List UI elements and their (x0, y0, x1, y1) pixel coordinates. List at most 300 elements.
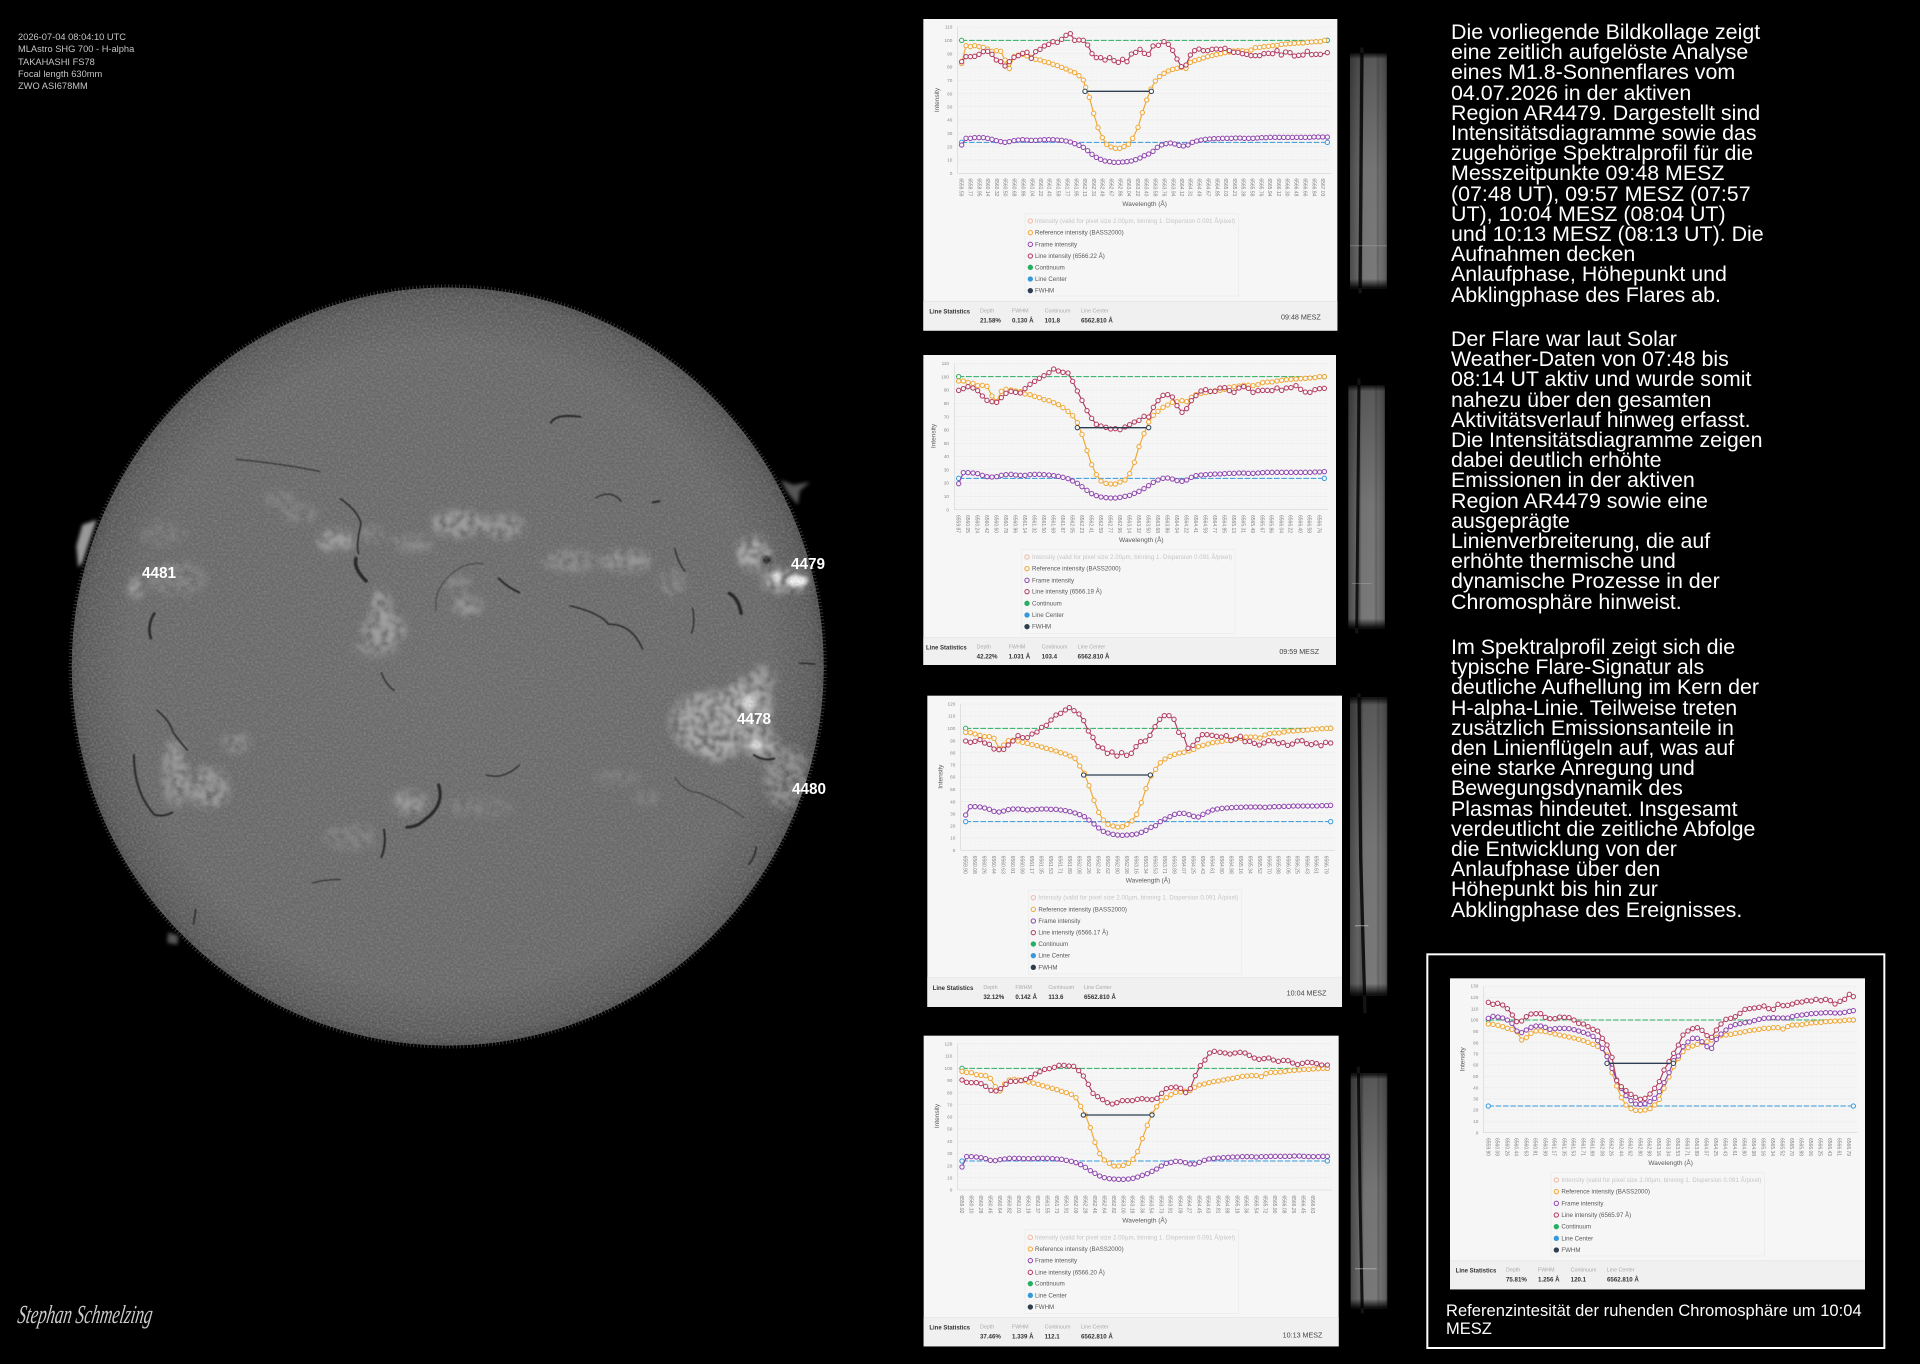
line statistics footer: Line Center (1607, 1267, 1635, 1273)
continuum and line center lines (1488, 1020, 1853, 1106)
y axis ticks: 0 (950, 1188, 953, 1193)
FWHM marker (1084, 773, 1150, 777)
x axis wavelength labels: 6566.06 (1284, 856, 1290, 874)
legend: Line Center (1035, 1292, 1067, 1299)
x axis wavelength labels: 6561.50 (1040, 515, 1046, 533)
x axis wavelength labels: 6564.59 (1201, 515, 1207, 533)
line statistics footer: Line Center (1081, 308, 1109, 314)
line statistics footer: 1.256 Å (1538, 1276, 1560, 1283)
series: reference intensity (962, 1068, 1327, 1166)
x axis wavelength labels: 6566.84 (1310, 178, 1316, 197)
line statistics footer: 0.142 Å (1015, 994, 1037, 1001)
x axis wavelength labels: 6560.44 (1513, 1138, 1519, 1156)
x axis wavelength labels: 6565.58 (1249, 178, 1255, 197)
y axis ticks: 60 (944, 428, 949, 433)
x axis wavelength labels: 6566.66 (1301, 178, 1307, 197)
x axis wavelength labels: 6563.16 (1132, 856, 1138, 874)
x axis wavelength labels: 6562.80 (1114, 856, 1120, 874)
y axis ticks: 100 (948, 726, 956, 731)
line statistics footer: 09:59 MESZ (1279, 648, 1320, 656)
y axis ticks: 120 (945, 1041, 953, 1046)
y axis ticks: 30 (947, 131, 953, 136)
x axis wavelength labels: 6560.32 (993, 178, 999, 197)
x axis wavelength labels: 6560.64 (996, 1195, 1002, 1214)
line statistics footer: FWHM (1012, 308, 1029, 314)
y axis ticks: 90 (947, 1078, 953, 1083)
line statistics footer (923, 637, 1336, 665)
line statistics footer: 37.46% (980, 1334, 1001, 1341)
x axis wavelength labels: 6561.89 (1589, 1138, 1595, 1156)
series: reference intensity (966, 728, 1331, 827)
x axis wavelength labels: 6564.45 (1195, 1195, 1201, 1214)
y axis ticks: 10 (1473, 1119, 1479, 1124)
series: frame intensity (1488, 1011, 1853, 1104)
x axis wavelength labels: 6560.99 (1019, 856, 1025, 874)
x axis wavelength labels: 6564.67 (1204, 178, 1210, 197)
x axis wavelength labels: 6561.59 (1055, 178, 1061, 197)
x axis wavelength labels: 6564.25 (1712, 1138, 1718, 1156)
legend: Reference intensity (BASS2000) (1038, 906, 1127, 913)
legend: Continuum (1032, 600, 1062, 607)
y axis ticks: 10 (947, 1175, 953, 1180)
legend: FWHM (1032, 624, 1051, 631)
x axis wavelength labels: 6562.23 (1078, 515, 1084, 533)
x axis wavelength labels: 6563.76 (1160, 178, 1166, 197)
y axis ticks: 70 (1473, 1051, 1479, 1056)
y axis ticks: 30 (1473, 1097, 1479, 1102)
y axis ticks: 0 (953, 848, 956, 853)
x axis wavelength labels: 6560.63 (1522, 1138, 1528, 1156)
y axis ticks: 110 (945, 1054, 953, 1059)
axis titles: Intensity (934, 87, 941, 112)
x axis wavelength labels: 6560.44 (990, 856, 996, 874)
legend: Reference intensity (BASS2000) (1035, 230, 1124, 237)
y axis ticks: 70 (947, 78, 953, 83)
line statistics footer: Continuum (1042, 644, 1068, 650)
legend: Continuum (1035, 1281, 1065, 1288)
line statistics footer: Continuum (1571, 1267, 1597, 1273)
x axis wavelength labels: 6564.31 (1187, 178, 1193, 197)
x axis wavelength labels: 6560.26 (1503, 1138, 1509, 1156)
x axis wavelength labels: 6562.80 (1636, 1138, 1642, 1156)
x axis wavelength labels: 6566.61 (1835, 1138, 1841, 1156)
y axis ticks: 70 (950, 763, 956, 768)
y axis ticks: 80 (947, 65, 953, 70)
x axis wavelength labels: 6561.89 (1066, 856, 1072, 874)
x axis wavelength labels: 6565.34 (1769, 1138, 1775, 1156)
panel: spectrum chart 09:48 MESZ (923, 19, 1387, 331)
x axis wavelength labels: 6564.12 (1178, 178, 1184, 197)
x axis wavelength labels: 6565.39 (1240, 178, 1246, 197)
x axis wavelength labels: 6564.85 (1213, 178, 1219, 197)
legend: Reference intensity (BASS2000) (1561, 1189, 1650, 1196)
x axis wavelength labels: 6559.90 (962, 856, 968, 874)
x axis wavelength labels: 6566.43 (1303, 856, 1309, 874)
x axis wavelength labels: 6560.08 (1494, 1138, 1500, 1156)
x axis wavelength labels: 6564.77 (1211, 515, 1217, 533)
line statistics footer: 09:48 MESZ (1281, 313, 1321, 321)
y axis ticks: 10 (944, 494, 949, 499)
x axis wavelength labels: 6566.63 (1309, 1195, 1315, 1214)
x axis wavelength labels: 6561.55 (1043, 1195, 1049, 1214)
x axis wavelength labels: 6560.26 (981, 856, 987, 874)
x axis wavelength labels: 6562.13 (1081, 178, 1087, 197)
axis titles (1460, 1046, 1693, 1167)
x axis wavelength labels: 6565.67 (1258, 515, 1264, 533)
x axis wavelength labels: 6561.37 (1034, 1195, 1040, 1214)
x axis wavelength labels: 6562.62 (1627, 1138, 1633, 1156)
legend: Line intensity (6565.97 Å) (1561, 1212, 1631, 1219)
y axis ticks: 110 (945, 25, 953, 30)
x axis wavelength labels: 6562.62 (1104, 856, 1110, 874)
x axis wavelength labels: 6563.04 (1125, 178, 1131, 197)
x axis wavelength labels: 6564.07 (1180, 856, 1186, 874)
x axis wavelength labels: 6567.03 (1319, 178, 1325, 197)
y axis ticks: 60 (1473, 1063, 1479, 1068)
x axis wavelength labels: 6566.43 (1826, 1138, 1832, 1156)
x axis wavelength labels: 6562.41 (1088, 515, 1094, 533)
x axis wavelength labels: 6563.54 (1148, 1195, 1154, 1214)
x axis wavelength labels: 6565.16 (1760, 1138, 1766, 1156)
y axis ticks (941, 361, 949, 512)
x axis wavelength labels: 6561.40 (1046, 178, 1052, 197)
x axis wavelength labels: 6566.61 (1313, 856, 1319, 874)
line statistics footer: Line Center (1084, 985, 1112, 991)
spectral strip 09:48 (1349, 47, 1388, 293)
x axis wavelength labels: 6565.18 (1233, 1195, 1239, 1214)
x axis wavelength labels: 6559.92 (958, 1195, 964, 1214)
signature: Stephan Schmelzing (16, 1300, 155, 1329)
panel: full-disk H-alpha image of the sun (68, 284, 1302, 1178)
line statistics footer: Depth (977, 644, 991, 650)
x axis wavelength labels: 6563.68 (1154, 515, 1160, 533)
legend: Continuum (1038, 941, 1068, 948)
x axis wavelength labels: 6565.16 (1237, 856, 1243, 874)
text block: introduction: Die vorliegende Bildkollage zeigt eine zeitlich aufgelöste Analyse eines M1.8-Sonnenflares vom 04.07.2026 in der aktiven Region AR4479. Dargestellt sind Intensitätsdiagramme sowie das zugehörige Spektralprofil für die Messzeitpunkte 09:48 MESZ (07:48 UT), 09:57 MESZ (07:57 UT), 10:04 MESZ (08:04 UT) und 10:13 MESZ (08:13 UT). Die Aufnahmen decken Anlaufphase, Höhepunkt und Abklingphase des Flares ab. (1451, 20, 1764, 307)
x axis wavelength labels: 6561.77 (1063, 178, 1069, 197)
x axis wavelength labels: 6565.90 (1271, 1195, 1277, 1214)
y axis ticks: 60 (950, 775, 956, 780)
line statistics footer: Line Statistics (929, 309, 971, 315)
x axis wavelength labels: 6561.32 (1031, 515, 1037, 533)
series: frame intensity (959, 472, 1324, 498)
series: frame intensity (962, 1156, 1327, 1179)
y axis ticks: 0 (946, 507, 949, 512)
x axis wavelength labels: 6566.48 (1293, 178, 1299, 197)
line statistics footer: 113.6 (1048, 994, 1064, 1001)
x axis wavelength labels: 6562.08 (1076, 856, 1082, 874)
line statistics footer: Line Statistics (929, 1326, 971, 1332)
x axis wavelength labels: 6563.86 (1163, 515, 1169, 533)
x axis wavelength labels: 6563.22 (1134, 178, 1140, 197)
legend: Continuum (1561, 1224, 1591, 1231)
axis titles: Wavelength (Å) (1119, 535, 1164, 544)
continuum and line center lines (962, 40, 1327, 142)
x axis wavelength labels: 6565.34 (1246, 856, 1252, 874)
x axis wavelength labels: 6559.95 (975, 178, 981, 197)
x axis wavelength labels: 6560.42 (983, 515, 989, 533)
x axis wavelength labels: 6562.09 (1072, 1195, 1078, 1214)
series: line intensity (962, 1051, 1327, 1104)
spectral strip 09:59 (1348, 378, 1386, 633)
label: region 4478: 4478 (737, 711, 771, 728)
line statistics footer (923, 301, 1337, 331)
x axis wavelength labels: 6561.87 (1059, 515, 1065, 533)
x axis wavelength labels: 6564.63 (1205, 1195, 1211, 1214)
panel: reference box with quiet chromosphere chart (1426, 953, 1886, 1349)
x axis wavelength labels: 6560.78 (1002, 515, 1008, 533)
continuum and line center lines (962, 1068, 1327, 1161)
y axis ticks: 90 (947, 51, 953, 56)
x axis wavelength labels: 6565.21 (1231, 178, 1237, 197)
x axis wavelength labels: 6561.19 (1024, 1195, 1030, 1214)
legend: FWHM (1038, 964, 1057, 971)
series: line intensity (962, 34, 1327, 67)
x axis wavelength labels: 6566.58 (1306, 515, 1312, 533)
y axis ticks: 110 (942, 361, 949, 366)
legend: Line intensity (6566.17 Å) (1038, 930, 1108, 937)
x axis wavelength labels: 6562.44 (1095, 856, 1101, 874)
x axis wavelength labels: 6564.80 (1741, 1138, 1747, 1156)
x axis wavelength labels: 6564.81 (1214, 1195, 1220, 1214)
legend (1028, 890, 1242, 974)
axis titles: Wavelength (Å) (1122, 199, 1167, 208)
x axis wavelength labels: 6559.77 (966, 178, 972, 197)
y axis ticks: 100 (945, 38, 953, 43)
line statistics footer: 0.130 Å (1012, 317, 1034, 324)
y axis ticks: 20 (1473, 1108, 1479, 1113)
line statistics footer: 112.1 (1045, 1334, 1060, 1341)
x axis wavelength labels (955, 515, 1321, 533)
y axis ticks: 100 (1471, 1018, 1479, 1023)
x axis wavelength labels: 6561.71 (1579, 1138, 1585, 1156)
y axis ticks: 20 (950, 824, 956, 829)
x axis wavelength labels: 6562.46 (1091, 1195, 1097, 1214)
x axis wavelength labels: 6562.82 (1110, 1195, 1116, 1214)
x axis wavelength labels: 6566.12 (1275, 178, 1281, 197)
x axis wavelength labels: 6563.94 (1169, 178, 1175, 197)
x axis wavelength labels: 6565.03 (1222, 178, 1228, 197)
x axis wavelength labels: 6560.14 (984, 178, 990, 197)
x axis wavelength labels: 6561.95 (1072, 178, 1078, 197)
prominences on the limb (76, 480, 810, 945)
x axis wavelength labels: 6563.40 (1143, 178, 1149, 197)
x axis wavelength labels: 6566.25 (1816, 1138, 1822, 1156)
text block: spectral profile: Im Spektralprofil zeigt sich die typische Flare-Signatur als deutliche Aufhellung im Kern der H-alpha-Linie. Teilweise treten zusätzlich Emissionsanteile in den Linienflügeln auf, was auf eine starke Anregung und Bewegungsdynamik des Plasmas hindeutet. Insgesamt verdeutlicht die zeitliche Abfolge die Entwicklung von der Anlaufphase über den Höhepunkt bis hin zur Abklingphase des Ereignisses. (1451, 635, 1759, 922)
x axis wavelength labels: 6565.52 (1256, 856, 1262, 874)
y axis ticks: 0 (1476, 1130, 1479, 1135)
x axis wavelength labels: 6564.49 (1196, 178, 1202, 197)
x axis wavelength labels: 6562.26 (1085, 856, 1091, 874)
legend: Intensity (valid for pixel size 2.00µm, binning 1. Dispersion 0.091 Å/pixel) (1038, 895, 1238, 902)
x axis wavelength labels: 6565.76 (1257, 178, 1263, 197)
x axis wavelength labels: 6561.17 (1551, 1138, 1557, 1156)
y axis ticks: 40 (944, 454, 949, 459)
x axis wavelength labels: 6564.43 (1199, 856, 1205, 874)
x axis wavelength labels: 6563.34 (1142, 856, 1148, 874)
legend: Line Center (1561, 1235, 1593, 1242)
spectral strip 10:13 (1350, 1067, 1388, 1313)
line statistics footer: 32.12% (983, 994, 1005, 1001)
legend: FWHM (1035, 288, 1054, 295)
x axis wavelength labels: 6566.79 (1845, 1138, 1851, 1156)
line statistics footer: FWHM (1009, 644, 1025, 650)
y axis ticks: 120 (1471, 995, 1479, 1000)
line statistics footer: 10:13 MESZ (1283, 1331, 1323, 1339)
x axis wavelength labels: 6565.13 (1230, 515, 1236, 533)
x axis wavelength labels: 6565.52 (1779, 1138, 1785, 1156)
x axis wavelength labels: 6564.04 (1173, 515, 1179, 533)
line statistics footer: 120.1 (1571, 1276, 1587, 1283)
x axis wavelength labels: 6559.90 (1484, 1138, 1490, 1156)
x axis wavelength labels: 6560.46 (986, 1195, 992, 1214)
label: region 4481: 4481 (142, 565, 176, 582)
legend: Continuum (1035, 264, 1065, 271)
x axis wavelength labels: 6564.80 (1218, 856, 1224, 874)
x axis wavelength labels: 6563.36 (1138, 1195, 1144, 1214)
y axis ticks: 10 (947, 158, 953, 163)
y axis ticks: 50 (947, 1127, 953, 1132)
x axis wavelength labels: 6562.98 (1123, 856, 1129, 874)
x axis wavelength labels: 6564.07 (1703, 1138, 1709, 1156)
caption: observation data: 2026-07-04 08:04:10 UTC MLAstro SHG 700 - H-alpha TAKAHASHI FS78 Focal length 630mm ZWO ASI678MM (18, 32, 134, 91)
x axis wavelength labels: 6561.53 (1047, 856, 1053, 874)
series: frame intensity (962, 137, 1327, 162)
x axis wavelength labels: 6559.87 (955, 515, 961, 533)
x axis wavelength labels: 6564.25 (1189, 856, 1195, 874)
line statistics footer: Line Center (1078, 644, 1105, 650)
x axis wavelength labels: 6565.86 (1268, 515, 1274, 533)
x axis wavelength labels: 6562.44 (1617, 1138, 1623, 1156)
x axis wavelength labels: 6561.17 (1028, 856, 1034, 874)
x axis wavelength labels: 6565.49 (1249, 515, 1255, 533)
y axis ticks: 90 (950, 738, 956, 743)
y axis ticks: 70 (947, 1102, 953, 1107)
y axis ticks: 0 (950, 171, 953, 176)
line statistics footer: Continuum (1045, 1325, 1071, 1331)
x axis wavelength labels: 6561.71 (1057, 856, 1063, 874)
axis titles (931, 423, 1164, 544)
sun disk (60, 280, 860, 1060)
x axis wavelength labels: 6563.53 (1674, 1138, 1680, 1156)
y axis ticks: 40 (950, 799, 956, 804)
x axis wavelength labels: 6566.04 (1277, 515, 1283, 533)
line statistics footer: 21.58% (980, 317, 1001, 324)
y axis ticks (948, 702, 956, 853)
x axis wavelength labels: 6560.28 (977, 1195, 983, 1214)
line statistics footer: 1.339 Å (1012, 1334, 1034, 1341)
legend: Intensity (valid for pixel size 2.00µm, binning 1. Dispersion 0.091 Å/pixel) (1561, 1177, 1761, 1184)
x axis wavelength labels: 6564.22 (1182, 515, 1188, 533)
label: region 4480: 4480 (792, 781, 826, 798)
x axis wavelength labels: 6563.89 (1693, 1138, 1699, 1156)
axis titles: Intensity (934, 1103, 941, 1128)
x axis wavelength labels: 6562.77 (1107, 515, 1113, 533)
x axis wavelength labels: 6564.41 (1192, 515, 1198, 533)
line statistics footer: Continuum (1048, 985, 1075, 991)
x axis wavelength labels: 6562.05 (1069, 515, 1075, 533)
x axis wavelength labels (962, 856, 1328, 874)
legend: Line Center (1038, 953, 1070, 960)
legend: Intensity (valid for pixel size 2.00µm, binning 1. Dispersion 0.091 Å/pixel) (1035, 1234, 1235, 1241)
spectral strip 10:04 (1349, 693, 1388, 1013)
y axis ticks: 130 (1471, 984, 1479, 989)
x axis wavelength labels: 6563.16 (1655, 1138, 1661, 1156)
line statistics footer: 75.81% (1506, 1276, 1527, 1283)
x axis wavelength labels (958, 178, 1325, 197)
FWHM marker (1083, 1113, 1152, 1117)
x axis wavelength labels: 6560.05 (964, 515, 970, 533)
x axis wavelength labels: 6559.59 (958, 178, 964, 197)
series: line intensity (966, 708, 1331, 756)
legend: Frame intensity (1032, 577, 1075, 584)
x axis wavelength labels: 6563.73 (1157, 1195, 1163, 1214)
series: reference intensity (962, 40, 1325, 148)
legend: Line intensity (6566.20 Å) (1035, 1269, 1105, 1276)
continuum and line center lines (966, 728, 1331, 822)
x axis wavelength labels: 6561.91 (1062, 1195, 1068, 1214)
y axis ticks: 90 (944, 388, 949, 393)
x axis wavelength labels: 6563.53 (1151, 856, 1157, 874)
x axis wavelength labels: 6562.59 (1097, 515, 1103, 533)
FWHM marker (1077, 426, 1149, 430)
x axis wavelength labels: 6564.98 (1750, 1138, 1756, 1156)
y axis ticks: 40 (947, 1139, 953, 1144)
x axis wavelength labels: 6560.50 (1002, 178, 1008, 197)
axis titles: Wavelength (Å) (1126, 876, 1170, 885)
legend: Line intensity (6566.22 Å) (1035, 253, 1105, 260)
panel: spectrum chart 09:59 MESZ (923, 355, 1385, 665)
y axis ticks: 40 (947, 118, 953, 123)
line statistics footer: Line Center (1081, 1325, 1109, 1331)
series: line intensity (959, 369, 1324, 430)
x axis wavelength labels: 6564.09 (1176, 1195, 1182, 1214)
x axis wavelength labels: 6560.68 (1011, 178, 1017, 197)
axis titles (934, 1103, 1167, 1224)
axis titles (934, 87, 1167, 208)
y axis ticks: 20 (944, 481, 949, 486)
x axis wavelength labels: 6566.08 (1281, 1195, 1287, 1214)
x axis wavelength labels: 6561.35 (1038, 856, 1044, 874)
x axis wavelength labels: 6562.49 (1099, 178, 1105, 197)
y axis ticks: 50 (950, 787, 956, 792)
FWHM marker (1607, 1061, 1673, 1065)
line statistics footer (924, 1317, 1339, 1346)
series: frame intensity (966, 805, 1331, 835)
line statistics footer: 6562.810 Å (1081, 1334, 1113, 1341)
x axis wavelength labels: 6565.88 (1797, 1138, 1803, 1156)
y axis ticks: 20 (947, 1163, 953, 1168)
x axis wavelength labels (958, 1195, 1315, 1214)
x axis wavelength labels: 6561.35 (1560, 1138, 1566, 1156)
caption of reference chart (1446, 1302, 1862, 1338)
x axis wavelength labels: 6562.08 (1598, 1138, 1604, 1156)
line statistics footer (1450, 1261, 1865, 1289)
y axis ticks: 50 (1473, 1074, 1479, 1079)
legend: Frame intensity (1035, 1258, 1078, 1265)
x axis wavelength labels: 6564.99 (1224, 1195, 1230, 1214)
legend: Frame intensity (1035, 241, 1078, 248)
x axis wavelength labels: 6561.53 (1570, 1138, 1576, 1156)
x axis wavelength labels: 6564.61 (1731, 1138, 1737, 1156)
y axis ticks (945, 25, 953, 176)
x axis wavelength labels: 6561.01 (1015, 1195, 1021, 1214)
x axis wavelength labels: 6564.43 (1722, 1138, 1728, 1156)
y axis ticks: 100 (945, 1066, 953, 1071)
line statistics footer: Line Statistics (1456, 1268, 1497, 1274)
caption of reference chart: MESZ (1446, 1320, 1492, 1338)
line statistics footer: 101.8 (1045, 317, 1061, 324)
